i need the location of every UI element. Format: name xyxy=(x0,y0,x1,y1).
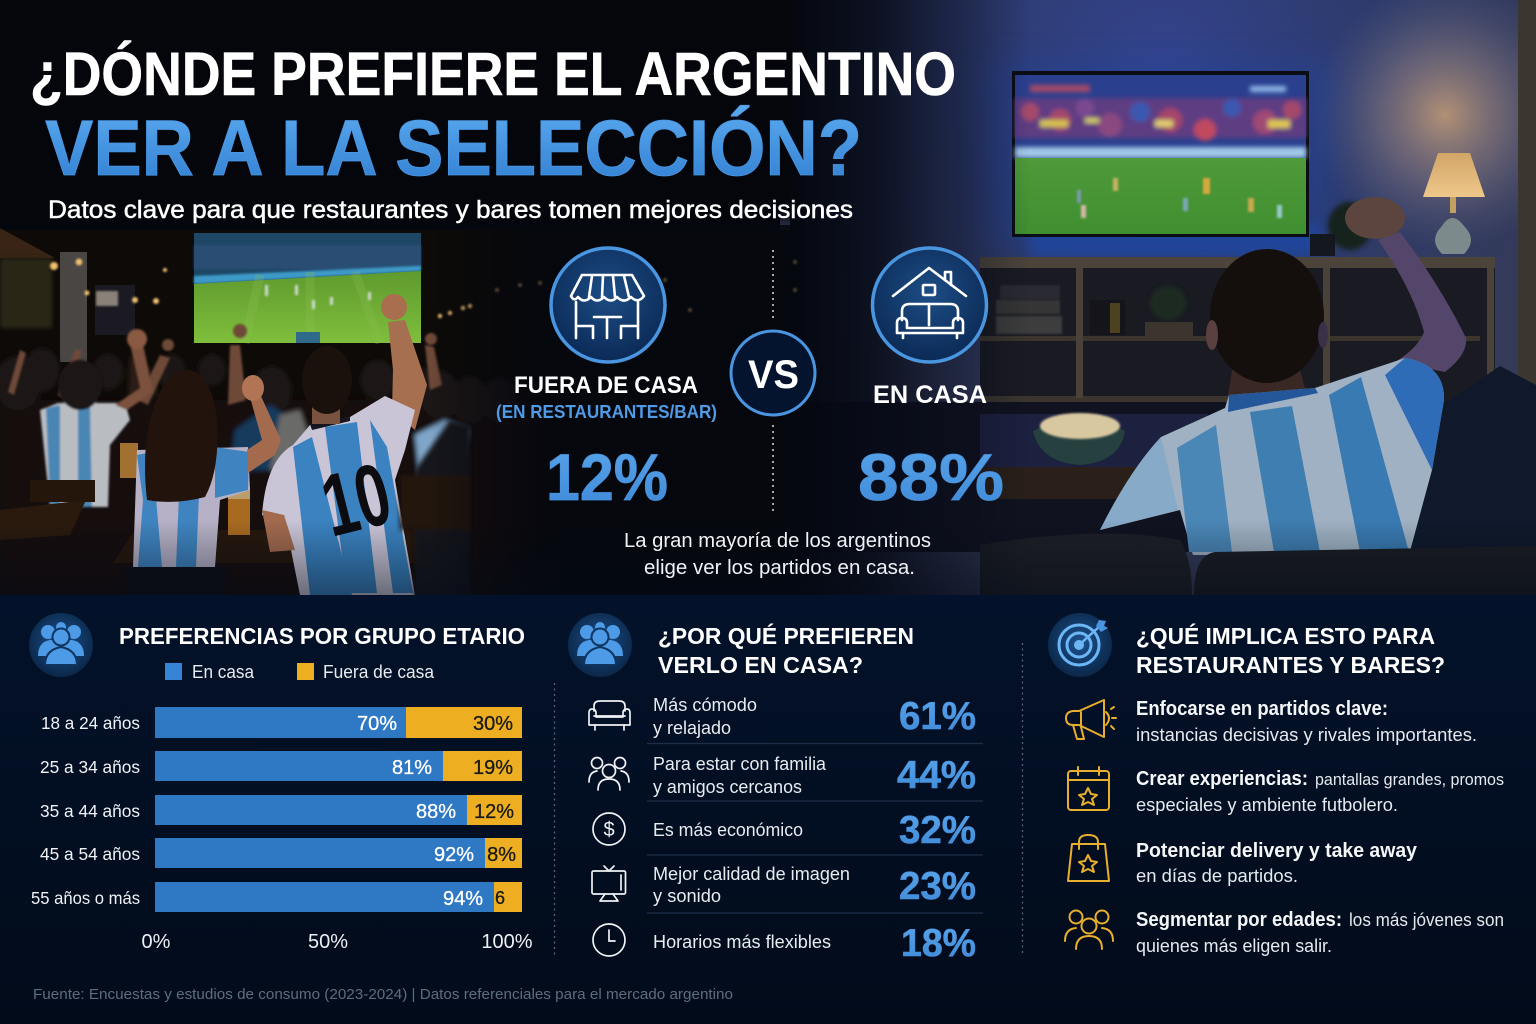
man with number 10 xyxy=(262,294,427,595)
bar: 35 a 44 xyxy=(40,795,522,825)
stat: 88%: 88% xyxy=(858,440,1004,514)
darkening overlays xyxy=(0,0,1536,600)
reason: image quality xyxy=(592,864,976,908)
heading xyxy=(658,622,914,678)
title xyxy=(30,40,956,192)
centre table xyxy=(113,530,420,563)
icon: target xyxy=(1048,613,1112,677)
note: La gran mayoría de los argentinos xyxy=(624,530,931,552)
plant xyxy=(1328,202,1372,250)
reason: image quality: 23% xyxy=(899,865,976,908)
heading: VERLO EN CASA? xyxy=(658,652,863,678)
bar: 18 a 24 xyxy=(41,707,522,738)
heading: ¿POR QUÉ PREFIEREN xyxy=(658,622,914,649)
left fan xyxy=(40,329,153,507)
legend: En casa xyxy=(192,662,255,682)
reason: savings: Es más económico xyxy=(653,820,803,840)
right crowd xyxy=(400,420,470,600)
badge: VS xyxy=(731,331,815,415)
bar: 35 a 44: 88% xyxy=(416,801,456,823)
reason: family: Para estar con familia xyxy=(653,754,827,774)
reason: schedule: 18% xyxy=(901,922,976,965)
bar chart xyxy=(31,707,533,953)
legend: Fuera de casa xyxy=(323,662,435,682)
dark pillows xyxy=(1395,366,1536,560)
reason: comfort: 61% xyxy=(899,695,976,738)
jersey number: 10 xyxy=(312,443,400,555)
item: experiences: especiales y ambiente futbolero. xyxy=(1136,795,1398,815)
item: segments: quienes más eligen salir. xyxy=(1136,936,1332,956)
woman xyxy=(125,370,281,597)
heading xyxy=(1136,622,1445,678)
reason: family xyxy=(589,754,976,797)
bar: 25 a 34: 19% xyxy=(473,757,513,779)
reason: family: 44% xyxy=(897,754,976,797)
icon: group xyxy=(568,613,632,677)
axis labels: 100% xyxy=(481,931,533,953)
heading: PREFERENCIAS POR GRUPO ETARIO xyxy=(119,623,525,649)
table and popcorn bowl xyxy=(980,414,1208,469)
heading: RESTAURANTES Y BARES? xyxy=(1136,652,1445,678)
legend xyxy=(165,662,435,682)
axis labels: 50% xyxy=(308,931,348,953)
item: experiences xyxy=(1068,767,1504,815)
reason: comfort: Más cómodo xyxy=(653,695,757,715)
item: segments: Segmentar por edades: xyxy=(1136,909,1342,931)
item: segments xyxy=(1065,909,1504,956)
background wood and lights xyxy=(0,230,790,600)
left table xyxy=(0,500,86,540)
reason: comfort: y relajado xyxy=(653,718,731,738)
bar: 45 a 54: 8% xyxy=(487,844,516,866)
divider: vertical dotted xyxy=(772,250,774,512)
title: ¿DÓNDE PREFIERE EL ARGENTINO xyxy=(30,40,956,108)
lamp xyxy=(1423,153,1485,197)
reason: savings: $ xyxy=(603,819,615,841)
lower room xyxy=(780,402,1536,552)
title: VER A LA SELECCIÓN? xyxy=(45,103,862,192)
panel: reasons xyxy=(568,613,983,965)
sofa xyxy=(980,534,1192,595)
stat: 12%: 12% xyxy=(546,440,668,514)
bar: 35 a 44: 35 a 44 años xyxy=(40,801,140,821)
item: experiences: pantallas grandes, promos xyxy=(1315,770,1504,789)
note: elige ver los partidos en casa. xyxy=(644,557,915,579)
item: key matches: Enfocarse en partidos clave: xyxy=(1136,698,1388,720)
item: key matches xyxy=(1066,698,1477,745)
divider lines xyxy=(554,643,1022,956)
bar: 55 o mas: 6 xyxy=(495,888,505,908)
bar: 25 a 34: 81% xyxy=(392,757,432,779)
bar: 45 a 54 xyxy=(40,838,522,868)
back crowd xyxy=(0,348,560,600)
reason: comfort xyxy=(589,695,976,738)
label: en casa: EN CASA xyxy=(873,381,987,409)
bar: 18 a 24: 30% xyxy=(473,713,513,735)
item: segments: los más jóvenes son xyxy=(1349,910,1504,930)
panel: implications xyxy=(1048,613,1504,956)
axis labels: 0% xyxy=(142,931,171,953)
bar: 18 a 24: 18 a 24 años xyxy=(41,713,140,733)
icon: restaurant xyxy=(551,248,665,362)
man xyxy=(1378,232,1466,372)
reason: savings: 32% xyxy=(899,809,976,852)
reason: image quality: y sonido xyxy=(653,886,721,906)
label: fuera de casa xyxy=(496,372,717,422)
badge: VS: VS xyxy=(748,353,799,397)
reason: savings xyxy=(593,809,976,852)
panel: age groups xyxy=(29,613,533,953)
shelf xyxy=(980,268,1495,408)
subtitle: Datos clave para que restaurantes y bares tomen mejores decisiones xyxy=(48,196,853,224)
bar: 45 a 54: 92% xyxy=(434,844,474,866)
bar: 35 a 44: 12% xyxy=(474,801,514,823)
bar: 55 o mas: 94% xyxy=(443,888,483,910)
panel: comparison xyxy=(496,248,1004,579)
photo: bar crowd watching big screen xyxy=(0,228,790,600)
photo: living room with fan watching TV xyxy=(780,0,1536,600)
big screen xyxy=(194,233,421,343)
footer source: Fuente: Encuestas y estudios de consumo (2023-2024) | Datos referenciales para el mercado argentino xyxy=(33,987,733,1003)
note xyxy=(624,530,931,579)
item: key matches: instancias decisivas y rivales importantes. xyxy=(1136,725,1477,745)
icon: home with sofa xyxy=(872,248,986,362)
label: fuera de casa: (EN RESTAURANTES/BAR) xyxy=(496,402,717,422)
item: delivery xyxy=(1068,835,1418,886)
bar: 18 a 24: 70% xyxy=(357,713,397,735)
reason: schedule xyxy=(593,922,976,965)
bar: 25 a 34: 25 a 34 años xyxy=(40,757,140,777)
heading: ¿QUÉ IMPLICA ESTO PARA xyxy=(1136,622,1435,649)
item: experiences: Crear experiencias: xyxy=(1136,768,1308,790)
bar: 55 o mas: 55 años o más xyxy=(31,888,140,908)
bar: 25 a 34 xyxy=(40,751,522,781)
item: delivery: Potenciar delivery y take away xyxy=(1136,840,1418,862)
axis labels xyxy=(142,931,533,953)
bar: 45 a 54: 45 a 54 años xyxy=(40,844,140,864)
reason: family: y amigos cercanos xyxy=(653,777,802,797)
reason: schedule: Horarios más flexibles xyxy=(653,932,831,952)
label: fuera de casa: FUERA DE CASA xyxy=(514,372,698,399)
reason: image quality: Mejor calidad de imagen xyxy=(653,864,850,884)
bottom background panel xyxy=(0,595,1536,1024)
item: delivery: en días de partidos. xyxy=(1136,866,1298,886)
icon: group xyxy=(29,613,93,677)
bar: 55 o mas xyxy=(31,882,522,912)
